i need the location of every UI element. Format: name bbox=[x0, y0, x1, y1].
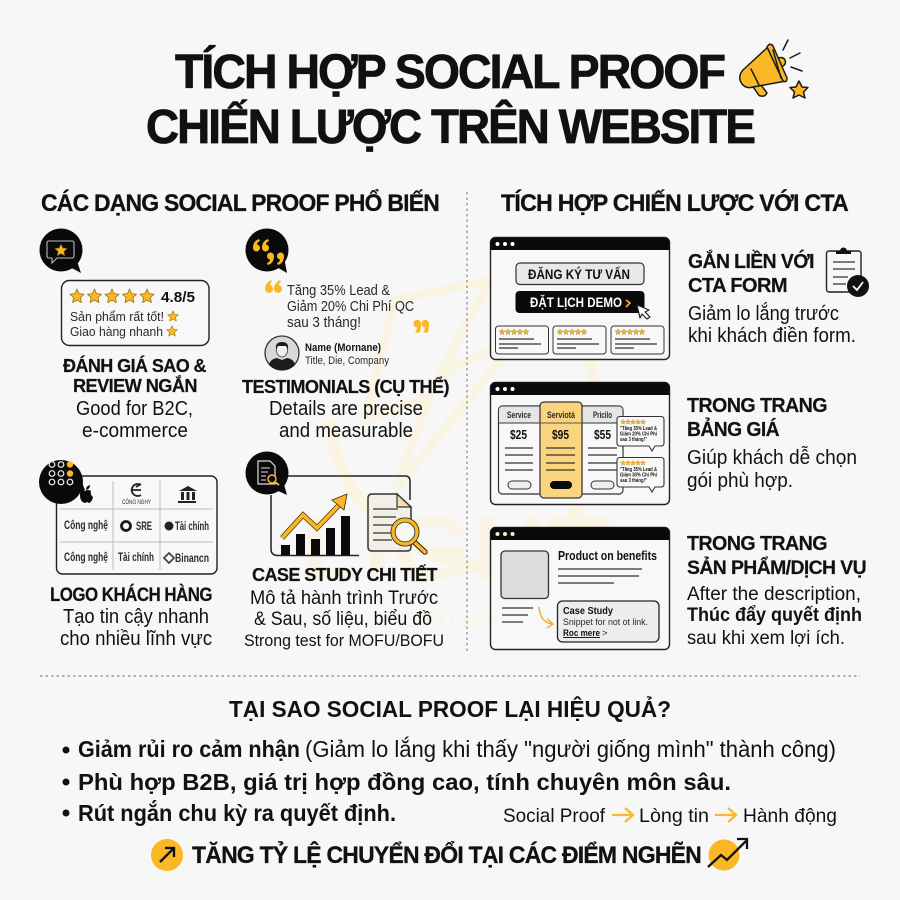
text: product page: Thúc đẩy quyết định bbox=[687, 605, 862, 626]
case study caption bbox=[244, 564, 444, 650]
pricing table: Service bbox=[507, 410, 531, 420]
flow: social proof to action bbox=[503, 805, 837, 827]
text: pricing page: BẢNG GIÁ bbox=[687, 418, 779, 441]
avatar and name: Title, Die, Company bbox=[305, 355, 389, 367]
review bubble bottom: Giảm 30% Chi Phí bbox=[620, 472, 658, 478]
heading: common forms: CÁC DẠNG SOCIAL PROOF PHỔ BIẾN bbox=[41, 189, 439, 217]
text: pricing page: gói phù hợp. bbox=[687, 470, 793, 492]
conclusion: TĂNG TỶ LỆ CHUYỂN ĐỔI TẠI CÁC ĐIỂM NGHẼN bbox=[192, 840, 701, 869]
logo caption bbox=[50, 584, 212, 650]
watermark logo bbox=[300, 280, 610, 633]
product heading bbox=[502, 549, 657, 622]
bullet list: Giảm rủi ro cảm nhận bbox=[78, 736, 300, 762]
heading: why it works: TẠI SAO SOCIAL PROOF LẠI HIỆU QUẢ? bbox=[229, 694, 671, 722]
icon: yellow arrow circle bbox=[151, 839, 183, 871]
case study caption: CASE STUDY CHI TIẾT bbox=[252, 564, 438, 585]
text: product page: After the description, bbox=[687, 584, 861, 605]
text: product page: TRONG TRANG bbox=[687, 533, 827, 555]
avatar and name bbox=[265, 336, 389, 370]
testimonial caption: TESTIMONIALS (CỤ THỂ) bbox=[242, 376, 449, 397]
logo grid: Tài chính bbox=[118, 552, 154, 564]
flow: social proof to action: Lòng tin bbox=[639, 805, 709, 827]
avatar and name: Name (Mornane) bbox=[305, 342, 381, 354]
review card bbox=[62, 280, 209, 346]
bullet list bbox=[62, 736, 836, 826]
review bubble bottom: "Tăng 35% Lead & bbox=[620, 467, 657, 473]
chart frame bbox=[271, 476, 410, 556]
bar chart with rising arrow bbox=[281, 494, 350, 555]
logo grid: CÔNG NGHY bbox=[122, 499, 151, 506]
demo button bbox=[516, 291, 644, 313]
review caption bbox=[63, 355, 206, 442]
heading: strategic integration: TÍCH HỢP CHIẾN LƯỢC VỚI CTA bbox=[501, 189, 848, 217]
text: CTA form: GẮN LIỀN VỚI bbox=[688, 249, 814, 273]
review card: Giao hàng nhanh bbox=[70, 324, 163, 339]
logo caption: Tạo tin cậy nhanh bbox=[63, 606, 209, 628]
review bubble bottom bbox=[617, 458, 664, 492]
product image placeholder bbox=[501, 551, 548, 598]
review caption: ĐÁNH GIÁ SAO & bbox=[63, 355, 206, 376]
quote text: Tăng 35% Lead & bbox=[287, 283, 390, 299]
text: pricing page bbox=[687, 395, 857, 492]
icon: cursor bbox=[637, 305, 650, 319]
review bubble top: "Tăng 35% Lead & bbox=[620, 426, 657, 432]
panel: CTA form mockup bbox=[490, 238, 670, 360]
logo grid: Tài chính bbox=[175, 521, 209, 533]
review mini cards bbox=[496, 326, 664, 354]
flow: social proof to action: Hành động bbox=[743, 805, 837, 827]
case study snippet bbox=[558, 601, 659, 642]
logo grid bbox=[56, 476, 217, 574]
panel: testimonials bbox=[242, 228, 449, 442]
text: CTA form: khi khách điền form. bbox=[688, 325, 856, 347]
review caption: REVIEW NGẮN bbox=[73, 375, 197, 396]
panel: client logos bbox=[39, 460, 217, 650]
text: CTA form: Giảm lo lắng trước bbox=[688, 302, 839, 325]
review card: Sản phẩm rất tốt! bbox=[70, 309, 164, 324]
case study caption: & Sau, số liệu, biểu đồ bbox=[254, 609, 432, 630]
quote text: sau 3 tháng! bbox=[287, 315, 361, 331]
icon: document search bubble bbox=[246, 452, 288, 495]
case study caption: Mô tả hành trình Trước bbox=[250, 588, 438, 609]
bullet list: (Giảm lo lắng khi thấy "người giống mình" thành công) bbox=[305, 736, 836, 762]
logo grid: SRE bbox=[136, 521, 152, 533]
text: product page: SẢN PHẨM/DỊCH VỤ bbox=[687, 557, 866, 579]
review bubble bottom: sau 3 tháng!" bbox=[620, 478, 648, 484]
panel: star reviews bbox=[40, 228, 209, 442]
pricing table: $95 bbox=[552, 427, 569, 442]
case study snippet: > bbox=[602, 628, 608, 639]
icon: megaphone with star bbox=[740, 40, 808, 98]
case study snippet: Roc mere bbox=[563, 628, 600, 639]
arrow: to case study bbox=[539, 607, 553, 628]
text: pricing page: TRONG TRANG bbox=[687, 395, 827, 417]
text: product page bbox=[687, 533, 866, 649]
title: TÍCH HỢP SOCIAL PROOF bbox=[175, 45, 725, 99]
logo caption: cho nhiều lĩnh vực bbox=[60, 628, 212, 650]
text: pricing page: Giúp khách dễ chọn bbox=[687, 446, 857, 469]
logo grid: Công nghệ bbox=[64, 552, 108, 564]
title: CHIẾN LƯỢC TRÊN WEBSITE bbox=[146, 99, 755, 154]
bullet list: Rút ngắn chu kỳ ra quyết định. bbox=[78, 799, 396, 826]
pricing table: Serviotá bbox=[547, 410, 576, 420]
icon: growth arrow circle bbox=[708, 839, 747, 870]
logo grid: Binancn bbox=[175, 553, 209, 565]
review bubble top: Giảm 20% Chi Phí bbox=[620, 432, 658, 438]
consultation button: ĐĂNG KÝ TƯ VẤN bbox=[528, 265, 630, 282]
icon: quote bubble bbox=[246, 228, 288, 273]
product heading: Product on benefits bbox=[558, 549, 657, 563]
pricing table: Pricilo bbox=[593, 410, 612, 420]
icon: logo dots bubble bbox=[39, 460, 85, 504]
quote text: Giảm 20% Chi Phí QC bbox=[287, 299, 414, 315]
panel: pricing mockup bbox=[490, 382, 670, 504]
review caption: Good for B2C, bbox=[76, 398, 193, 420]
pricing table: $55 bbox=[594, 427, 611, 442]
quote text bbox=[265, 280, 429, 333]
logo grid: Công nghệ bbox=[64, 520, 108, 532]
icon: clipboard check bbox=[826, 248, 869, 297]
flow: social proof to action: Social Proof bbox=[503, 805, 606, 827]
case study snippet: Snippet for not ot link. bbox=[563, 617, 648, 628]
panel: case study bbox=[244, 452, 444, 650]
review bubble top: sau 3 tháng!" bbox=[620, 437, 648, 443]
review card: 4.8/5 bbox=[161, 290, 195, 306]
review bubble top bbox=[617, 416, 664, 451]
icon: star speech bubble bbox=[40, 228, 82, 273]
pricing table bbox=[498, 402, 623, 498]
bullet list: Phù hợp B2B, giá trị hợp đồng cao, tính chuyên môn sâu. bbox=[78, 769, 731, 795]
testimonial caption: Details are precise bbox=[269, 398, 423, 420]
testimonial caption: and measurable bbox=[279, 420, 413, 442]
panel: product page mockup bbox=[490, 528, 670, 650]
testimonial caption bbox=[242, 376, 449, 442]
text: CTA form: CTA FORM bbox=[688, 275, 787, 297]
demo button: ĐẶT LỊCH DEMO bbox=[530, 294, 622, 310]
watermark logo: LIGHT bbox=[300, 498, 610, 600]
review caption: e-commerce bbox=[82, 420, 188, 442]
document with magnifier bbox=[368, 494, 425, 552]
case study snippet: Case Study bbox=[563, 605, 613, 617]
case study caption: Strong test for MOFU/BOFU bbox=[244, 632, 444, 650]
watermark logo: Chuẩn bbox=[390, 608, 520, 633]
pricing table: $25 bbox=[510, 427, 527, 442]
title bbox=[146, 45, 755, 154]
consultation button bbox=[516, 263, 644, 284]
text: CTA form bbox=[688, 249, 856, 347]
text: product page: sau khi xem lợi ích. bbox=[687, 628, 845, 649]
logo caption: LOGO KHÁCH HÀNG bbox=[50, 584, 212, 606]
